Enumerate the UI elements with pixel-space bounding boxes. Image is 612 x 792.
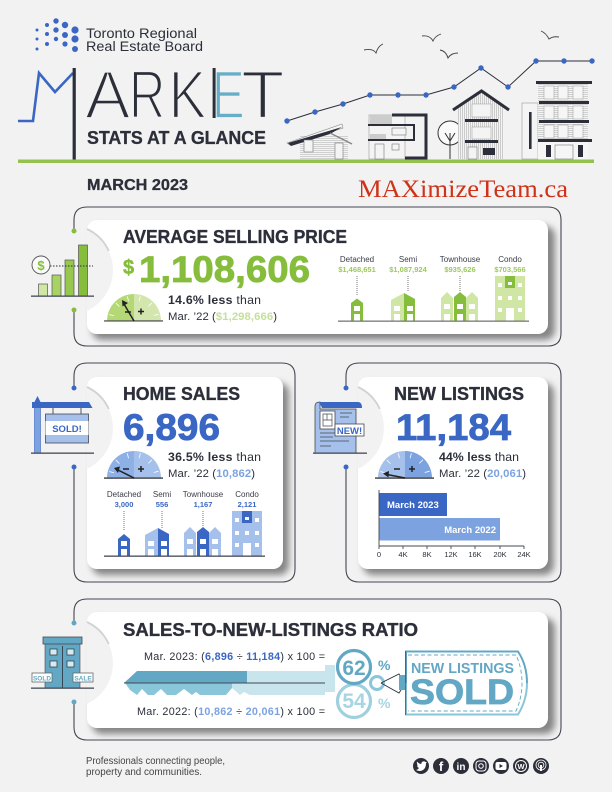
bar chart: listings 2023 vs 2022 bbox=[377, 490, 531, 559]
house: modern bbox=[368, 115, 426, 159]
change text: 14.6% less than bbox=[168, 293, 261, 307]
detached bbox=[118, 534, 130, 556]
ratio circles: 54 bbox=[342, 690, 366, 713]
condo bbox=[495, 276, 525, 321]
bar chart: listings 2023 vs 2022: March 2022 bbox=[444, 525, 496, 536]
icon: apartment building with signs bbox=[31, 637, 94, 689]
logo: Toronto Regional Real Estate Board: Toronto Regional bbox=[86, 26, 197, 41]
change text bbox=[168, 293, 277, 323]
bar chart: listings 2023 vs 2022: 20K bbox=[493, 550, 507, 559]
change text bbox=[439, 450, 526, 480]
house types: prices: $1,468,651 bbox=[338, 265, 376, 274]
icon: sold sign bbox=[31, 396, 94, 454]
house types: sales: Townhouse bbox=[183, 490, 224, 499]
house types: sales: 1,167 bbox=[194, 500, 212, 509]
ratio circles: % bbox=[378, 695, 391, 711]
apartment building bbox=[522, 81, 592, 159]
house types: sales: 3,000 bbox=[115, 500, 133, 509]
icon: key chart bbox=[124, 665, 335, 695]
detached bbox=[351, 298, 363, 321]
value: 11,184 bbox=[396, 407, 511, 448]
birds bbox=[364, 31, 559, 58]
gauge bbox=[375, 451, 434, 479]
title: MARKET bbox=[18, 56, 285, 162]
house types: prices: $1,087,924 bbox=[389, 265, 428, 274]
bar chart: listings 2023 vs 2022: 12K bbox=[444, 550, 458, 559]
panel: average selling price bbox=[31, 207, 561, 346]
house: slanted roof bbox=[287, 124, 352, 159]
house types: sales: Semi bbox=[153, 490, 171, 499]
logo: Toronto Regional Real Estate Board: Real Estate Board bbox=[86, 39, 203, 54]
house types: prices: Detached bbox=[340, 255, 374, 264]
icon: apartment building with signs: SALE bbox=[74, 676, 92, 682]
tagline: property and communities. bbox=[86, 767, 202, 778]
bar chart: listings 2023 vs 2022: 16K bbox=[468, 550, 482, 559]
ratio circles bbox=[338, 650, 391, 718]
trend line bbox=[284, 58, 595, 124]
logo: Toronto Regional Real Estate Board bbox=[36, 18, 203, 54]
house types: prices bbox=[338, 255, 529, 322]
green ground line bbox=[18, 160, 594, 163]
change text: Mar. ’22 (10,862) bbox=[168, 468, 255, 480]
townhouse bbox=[441, 292, 478, 321]
tagline bbox=[86, 756, 225, 778]
social media icons: W bbox=[517, 762, 525, 771]
title: MARKET: K bbox=[168, 57, 207, 133]
house: tall gabled bbox=[453, 91, 509, 159]
house types: prices: $935,626 bbox=[444, 265, 476, 274]
tag: new listings sold bbox=[381, 651, 527, 715]
ratio circles: % bbox=[378, 657, 391, 673]
house types: sales: 556 bbox=[156, 500, 168, 509]
house types: sales: Condo bbox=[235, 490, 259, 499]
value: 6,896 bbox=[123, 407, 220, 448]
heading: AVERAGE SELLING PRICE bbox=[123, 227, 347, 247]
bar chart: listings 2023 vs 2022: March 2023 bbox=[387, 500, 439, 511]
bar chart: listings 2023 vs 2022: 0 bbox=[377, 550, 381, 559]
social media icons bbox=[413, 758, 549, 774]
icon: apartment building with signs: SOLD bbox=[33, 676, 51, 682]
panel: new listings bbox=[313, 363, 561, 582]
heading: HOME SALES bbox=[123, 384, 240, 404]
panel: sales-to-new-listings ratio bbox=[31, 599, 561, 740]
semi bbox=[391, 293, 415, 321]
tag: new listings sold: NEW LISTINGS bbox=[411, 661, 514, 677]
house types: prices: $703,566 bbox=[494, 265, 526, 274]
change text: Mar. ’22 (20,061) bbox=[439, 468, 526, 480]
icon: new listing document: NEW! bbox=[337, 426, 362, 437]
title: MARKET: A bbox=[85, 57, 131, 133]
header illustration: skyline with trend line bbox=[284, 31, 595, 159]
semi bbox=[145, 528, 169, 556]
heading: SALES-TO-NEW-LISTINGS RATIO bbox=[123, 620, 418, 640]
house types: prices: Semi bbox=[399, 255, 417, 264]
change text: Mar. ’22 ($1,298,666) bbox=[168, 311, 277, 323]
tree bbox=[438, 121, 462, 159]
gauge bbox=[104, 294, 163, 322]
date: MARCH 2023 bbox=[87, 177, 188, 194]
change text bbox=[168, 450, 261, 480]
house types: sales: 2,121 bbox=[238, 500, 256, 509]
heading: NEW LISTINGS bbox=[394, 384, 524, 404]
tagline: Professionals connecting people, bbox=[86, 756, 225, 767]
icon: sold sign: SOLD! bbox=[52, 424, 82, 435]
house types: prices: Condo bbox=[498, 255, 522, 264]
condo bbox=[232, 511, 262, 556]
bar chart: listings 2023 vs 2022: 24K bbox=[517, 550, 531, 559]
title: MARKET: R bbox=[129, 57, 165, 133]
title: MARKET: T bbox=[241, 57, 285, 133]
subtitle: stats at a glance: STATS AT A GLANCE bbox=[87, 128, 266, 148]
formula 2023: Mar. 2023: (6,896 ÷ 11,184) x 100 = bbox=[144, 651, 325, 663]
house types: sales: Detached bbox=[107, 490, 141, 499]
tag: new listings sold: SOLD bbox=[410, 673, 514, 712]
change text: 44% less than bbox=[439, 450, 519, 464]
icon: price bar chart: $ bbox=[37, 258, 45, 273]
house types: prices: Townhouse bbox=[440, 255, 481, 264]
social media icons: in bbox=[457, 762, 465, 773]
value: 1,108,606 bbox=[139, 249, 310, 290]
website name: MAXimizeTeam.ca bbox=[358, 176, 568, 203]
bar chart: listings 2023 vs 2022: 8K bbox=[422, 550, 432, 559]
icon: price bar chart bbox=[31, 245, 94, 297]
icon: new listing document bbox=[313, 402, 367, 454]
social media icons: f bbox=[439, 759, 444, 774]
house types: sales bbox=[104, 490, 265, 557]
panel: home sales bbox=[31, 363, 295, 582]
gauge bbox=[104, 451, 163, 479]
value: $ bbox=[123, 257, 134, 279]
change text: 36.5% less than bbox=[168, 450, 261, 464]
townhouse bbox=[184, 527, 221, 556]
ratio circles: 62 bbox=[342, 657, 366, 680]
title: MARKET: E bbox=[212, 56, 245, 133]
formula 2022: Mar. 2022: (10,862 ÷ 20,061) x 100 = bbox=[137, 706, 325, 718]
bar chart: listings 2023 vs 2022: 4K bbox=[398, 550, 408, 559]
